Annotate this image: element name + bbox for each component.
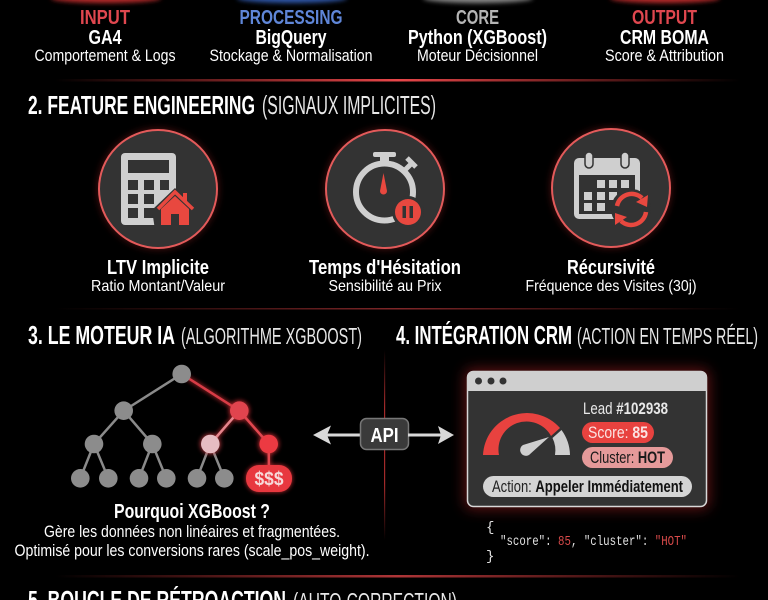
CRM window panel	[465, 369, 709, 509]
arrow: API to CRM	[408, 426, 454, 444]
feature: Temps d'Hésitation: Sensibilité au Prix	[328, 278, 442, 295]
text block: why XGBoost: Gère les données non linéaires et fragmentées.	[44, 522, 340, 541]
heading: section 3: 3. LE MOTEUR IA	[28, 322, 175, 350]
text block: why XGBoost	[14, 501, 370, 560]
cluster pill: Cluster: HOT	[590, 448, 665, 467]
feature: LTV Implicite: Ratio Montant/Valeur	[91, 278, 226, 295]
window dots	[475, 378, 506, 384]
heading: section 3: (ALGORITHME XGBOOST)	[181, 323, 362, 349]
JSON code snippet	[486, 520, 687, 565]
icon: stopwatch with pause	[356, 152, 424, 228]
heading: section 4: 4. INTÉGRATION CRM	[396, 321, 572, 350]
CRM window panel: Lead #102938	[583, 399, 668, 418]
pipeline column: output	[605, 7, 724, 65]
top glow remnants of cropped pipeline icons	[51, 0, 720, 3]
pipeline column: processing: Stockage & Normalisation	[210, 46, 372, 65]
JSON code snippet: "score": 85, "cluster": "HOT"	[500, 534, 687, 550]
pipeline column: output: OUTPUT	[632, 7, 697, 29]
feature: LTV Implicite	[91, 129, 226, 295]
decision tree chart: $$$	[254, 469, 284, 490]
heading: section 2: (SIGNAUX IMPLICITES)	[262, 92, 436, 120]
text block: why XGBoost: Pourquoi XGBoost ?	[114, 501, 270, 523]
JSON code snippet: }	[486, 549, 494, 565]
API badge	[360, 418, 408, 450]
text block: why XGBoost: Optimisé pour les conversions rares (scale_pos_weight).	[14, 541, 370, 560]
pipeline column: core: Python (XGBoost)	[408, 27, 547, 49]
pipeline column: processing	[210, 7, 372, 65]
pipeline column: processing: BigQuery	[256, 27, 327, 49]
pipeline column: input	[34, 7, 176, 65]
JSON code snippet: {	[486, 520, 494, 536]
heading: section 2: 2. FEATURE ENGINEERING	[28, 92, 255, 120]
feature: Temps d'Hésitation: Temps d'Hésitation	[309, 257, 461, 279]
pipeline column: input: GA4	[88, 27, 122, 49]
pipeline column: output: Score & Attribution	[605, 46, 724, 65]
icon: calculator with house	[121, 153, 195, 230]
feature: LTV Implicite: LTV Implicite	[107, 257, 209, 279]
feature: Récursivité	[526, 128, 696, 295]
heading: section 3	[28, 322, 362, 350]
pipeline column: core: Moteur Décisionnel	[417, 46, 538, 65]
icon: calendar with refresh	[574, 152, 651, 229]
decision tree chart	[71, 365, 292, 492]
pipeline column: core	[408, 7, 547, 65]
score pill: Score: 85	[588, 423, 648, 442]
pipeline column: output: CRM BOMA	[620, 27, 709, 49]
gauge	[483, 413, 570, 456]
feature: Récursivité: Fréquence des Visites (30j)	[526, 278, 696, 295]
feature: Temps d'Hésitation	[309, 129, 461, 295]
feature: Récursivité: Récursivité	[567, 257, 655, 279]
pipeline column: input: INPUT	[80, 7, 130, 29]
pipeline column: input: Comportement & Logs	[34, 46, 176, 65]
arrow: API to tree	[313, 426, 361, 444]
pipeline column: processing: PROCESSING	[240, 7, 342, 29]
action pill: Action: Appeler Immédiatement	[492, 477, 683, 496]
API badge: API	[370, 425, 398, 447]
pipeline column: core: CORE	[456, 7, 499, 29]
